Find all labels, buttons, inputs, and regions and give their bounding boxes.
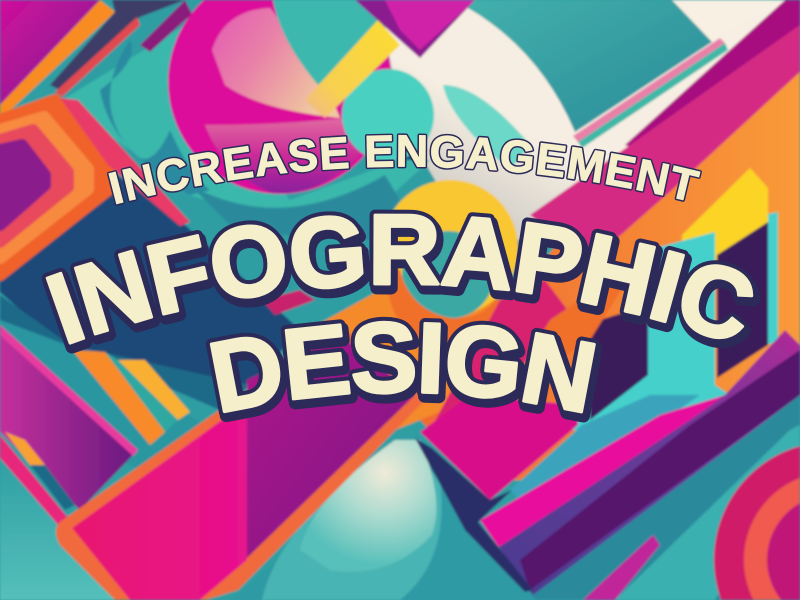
bottom dome field [233,440,535,600]
headline shadow layer: INFOGRAPHIC [42,218,760,354]
red band [55,17,140,97]
dark slate band [50,0,185,90]
headline shadow layer: INFOGRAPHIC [42,210,750,324]
small magenta diamond [262,290,315,315]
right magenta stripe [530,25,800,262]
thin pink band [573,38,725,142]
cyan block [570,232,730,430]
headline shadow layer: DESIGN [206,316,600,414]
lower cyan band [510,395,700,510]
navy swirl [0,170,300,385]
title: infographic: INFOGRAPHIC [46,214,754,345]
orange strip [0,0,115,120]
purple stripe [140,0,192,52]
right teal disc [342,69,434,161]
dark teal swirl [100,40,210,195]
purple band [499,330,800,595]
teal swirl band [190,175,400,240]
headline shadow layer: INCREASE ENGAGEMENT [107,133,702,206]
orange centre field [270,290,500,440]
yellow sun [382,180,518,316]
crimson diagonal [430,280,590,430]
teal lower stripes [615,425,800,600]
title: design: DESIGN [210,320,596,414]
dome halo [262,440,442,600]
sun teal core [402,231,494,319]
pink edge [0,325,138,456]
salmon diagonal [60,98,190,226]
bottom right circle [714,446,800,600]
top magenta ball [168,0,392,194]
magenta block [420,395,578,500]
ball inner glow [212,8,340,118]
teal swirl [62,25,430,225]
blue lower swirl [0,295,250,410]
orange mini stripe [5,432,45,465]
right yellow shape [682,168,768,268]
top right cream corner [672,0,778,40]
teal leaf [443,85,530,170]
dark purple tower right [717,222,768,378]
navy notch [400,85,432,165]
dark purple tower left [590,305,648,420]
left concentric ring [0,100,108,275]
orange ring [385,260,545,352]
teal strip [105,352,178,432]
thin teal band [578,43,728,148]
dark purple band [520,350,800,590]
bottom right teal field [480,380,800,600]
amber stripe one [72,350,165,445]
subtitle: increase engagement: INCREASE ENGAGEMENT [108,134,700,204]
cyan sliver [768,212,778,345]
main panel purple face [247,335,415,558]
magenta wedge [583,535,660,600]
lower left purple stripes [0,335,133,510]
teal top shape [273,0,392,85]
ball lower purple [205,118,380,193]
main panel magenta face [72,335,340,600]
bottom left teal [0,455,115,600]
bottom right ring [744,478,800,600]
top left magenta square [0,0,100,105]
dome [300,440,436,572]
main panel orange edge [56,325,430,600]
amber stripe two [118,360,190,420]
top right teal panel [468,0,712,132]
right orange field [420,60,800,480]
headline shadow layer [42,133,760,422]
top diamond [355,0,475,58]
headline shadow layer: DESIGN [218,322,603,422]
navy edge [415,438,533,592]
pink stripe [0,435,70,525]
white band [380,0,800,240]
bottom right core [767,503,800,600]
hot magenta band [477,395,725,547]
dark teal mini stripe [30,465,75,510]
right dark magenta stripe [625,0,800,150]
teal lower left band [0,320,230,470]
yellow stripe [305,20,400,118]
